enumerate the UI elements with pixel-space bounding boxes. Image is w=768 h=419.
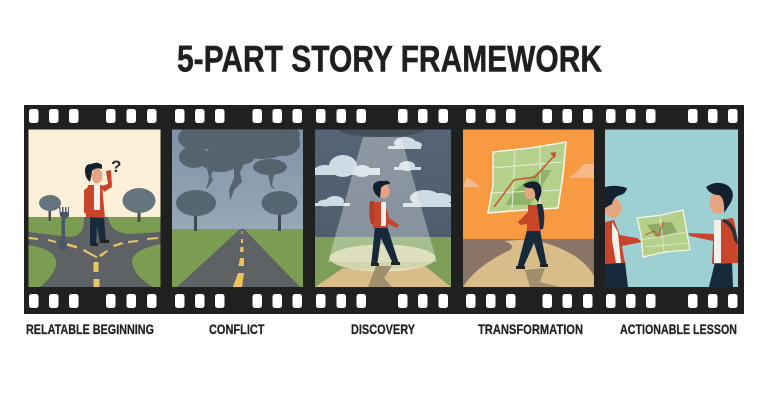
question mark: ? xyxy=(111,157,121,176)
person shadow xyxy=(525,268,560,287)
icon: person right xyxy=(688,183,738,287)
icon: signpost xyxy=(59,207,69,250)
icon: person left xyxy=(604,186,642,287)
map with arrow xyxy=(488,142,566,213)
label: discovery: DISCOVERY xyxy=(351,321,416,337)
film strip xyxy=(24,105,744,314)
icon: tree left xyxy=(39,195,61,221)
crossroads xyxy=(28,217,160,287)
road dashes xyxy=(28,237,158,287)
clouds xyxy=(463,164,594,187)
light beam xyxy=(328,137,437,262)
icon: tree left xyxy=(176,190,216,231)
icon: tree right xyxy=(122,188,156,222)
icon: tree right xyxy=(262,191,298,231)
icon: person at crossroads xyxy=(84,157,121,246)
growth arrow xyxy=(494,155,555,207)
icon: person walking xyxy=(369,181,400,266)
panel: conflict xyxy=(172,118,303,287)
person shadow xyxy=(368,266,392,287)
icon: person walking xyxy=(516,181,548,269)
road dashes xyxy=(233,231,244,287)
ground path xyxy=(315,266,451,287)
panel: relatable beginning xyxy=(28,130,160,288)
panel: actionable lesson xyxy=(604,130,738,288)
winding path xyxy=(463,239,594,287)
panel: transformation xyxy=(463,130,594,287)
label: transformation: TRANSFORMATION xyxy=(478,321,583,337)
sprocket holes: bottom row xyxy=(29,294,738,308)
label: relatable beginning: RELATABLE BEGINNING xyxy=(26,321,154,337)
road xyxy=(177,229,300,287)
sprocket holes: top row xyxy=(29,109,738,123)
title: 5-PART STORY FRAMEWORK xyxy=(177,38,602,80)
map xyxy=(637,210,690,257)
light pool xyxy=(330,244,436,272)
clouds xyxy=(315,137,452,207)
storm clouds xyxy=(178,130,300,201)
panel: discovery xyxy=(315,123,452,287)
label: conflict: CONFLICT xyxy=(209,321,265,337)
